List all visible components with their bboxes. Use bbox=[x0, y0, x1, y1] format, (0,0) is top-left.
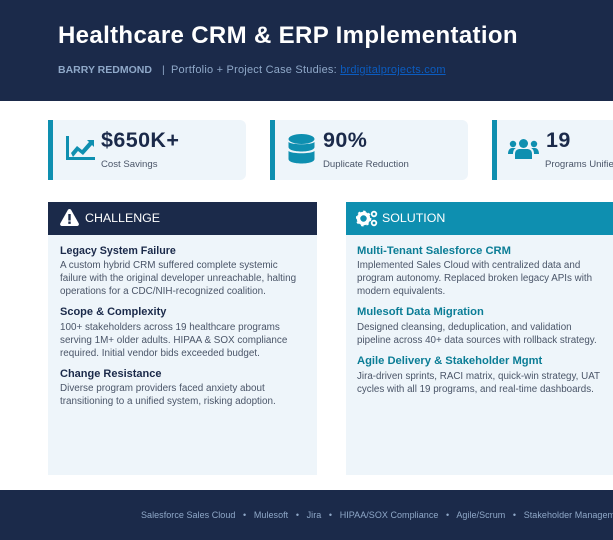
item: agile delivery: Jira-driven sprints, RACI matrix, quick-win strategy, UAT bbox=[357, 371, 600, 382]
item: agile delivery: Agile Delivery & Stakeholder Mgmt bbox=[357, 355, 542, 367]
icon: chart bbox=[66, 136, 95, 160]
item: change resistance bbox=[60, 368, 276, 407]
item: mulesoft data migration: pipeline across 40+ data sources with rollback strategy. bbox=[357, 335, 597, 346]
item: legacy system failure: failure with the original developer unreachable, halting bbox=[60, 273, 296, 284]
label: Cost Savings bbox=[101, 159, 158, 170]
item: multi-tenant salesforce crm: Implemented Sales Cloud with centralized data and bbox=[357, 260, 580, 271]
item: agile delivery: cycles with all 19 programs, and real-time dashboards. bbox=[357, 384, 594, 395]
item: multi-tenant salesforce crm bbox=[357, 245, 592, 297]
subtitle: BARRY REDMOND bbox=[58, 64, 152, 76]
item: legacy system failure: A custom hybrid CRM suffered complete systemic bbox=[60, 260, 278, 271]
heading text: SOLUTION bbox=[382, 211, 445, 225]
item: legacy system failure bbox=[60, 245, 296, 297]
item: mulesoft data migration bbox=[357, 306, 597, 346]
item: change resistance: Diverse program providers faced anxiety about bbox=[60, 383, 265, 394]
heading text: CHALLENGE bbox=[85, 211, 160, 225]
label: Duplicate Reduction bbox=[323, 159, 409, 170]
item: mulesoft data migration: Mulesoft Data Migration bbox=[357, 306, 484, 318]
stat card: duplicate reduction bbox=[270, 120, 468, 180]
panel: solution bbox=[346, 202, 613, 475]
header band bbox=[0, 0, 613, 101]
item: multi-tenant salesforce crm: modern equivalents. bbox=[357, 286, 445, 297]
item: multi-tenant salesforce crm: program autonomy. Replaced broken legacy APIs with bbox=[357, 273, 592, 284]
icon: warning bbox=[60, 209, 79, 226]
icon: gears bbox=[356, 210, 378, 226]
item: change resistance: transitioning to a unified system, risking adoption. bbox=[60, 396, 276, 407]
challenge heading bbox=[48, 202, 317, 235]
stat card: cost savings bbox=[48, 120, 246, 180]
item: agile delivery bbox=[357, 355, 600, 395]
icon: database bbox=[288, 134, 314, 164]
title: Healthcare CRM & ERP Implementation bbox=[58, 22, 518, 49]
item: scope and complexity: Scope & Complexity bbox=[60, 306, 166, 318]
item: scope and complexity: required. Initial vendor bids exceeded budget. bbox=[60, 348, 260, 359]
item: mulesoft data migration: Designed cleansing, deduplication, and validation bbox=[357, 322, 572, 333]
panel: challenge bbox=[48, 202, 317, 475]
value: $650K+ bbox=[101, 128, 179, 152]
item: scope and complexity: serving 1M+ older adults. HIPAA & SOX compliance bbox=[60, 335, 287, 346]
value: 19 bbox=[546, 128, 571, 152]
item: scope and complexity: 100+ stakeholders across 19 healthcare programs bbox=[60, 322, 280, 333]
item: change resistance: Change Resistance bbox=[60, 368, 161, 380]
icon: users bbox=[508, 139, 539, 159]
stat card: programs unified bbox=[492, 120, 613, 180]
subtitle: | bbox=[162, 64, 165, 76]
item: scope and complexity bbox=[60, 306, 287, 359]
value: 90% bbox=[323, 128, 367, 152]
subtitle: Portfolio + Project Case Studies: brdigitalprojects.com bbox=[171, 64, 446, 76]
footer band bbox=[0, 490, 613, 540]
item: multi-tenant salesforce crm: Multi-Tenant Salesforce CRM bbox=[357, 245, 511, 257]
item: legacy system failure: operations for a CDC/NIH-recognized coalition. bbox=[60, 286, 266, 297]
solution heading bbox=[346, 202, 613, 235]
item: legacy system failure: Legacy System Failure bbox=[60, 245, 176, 257]
